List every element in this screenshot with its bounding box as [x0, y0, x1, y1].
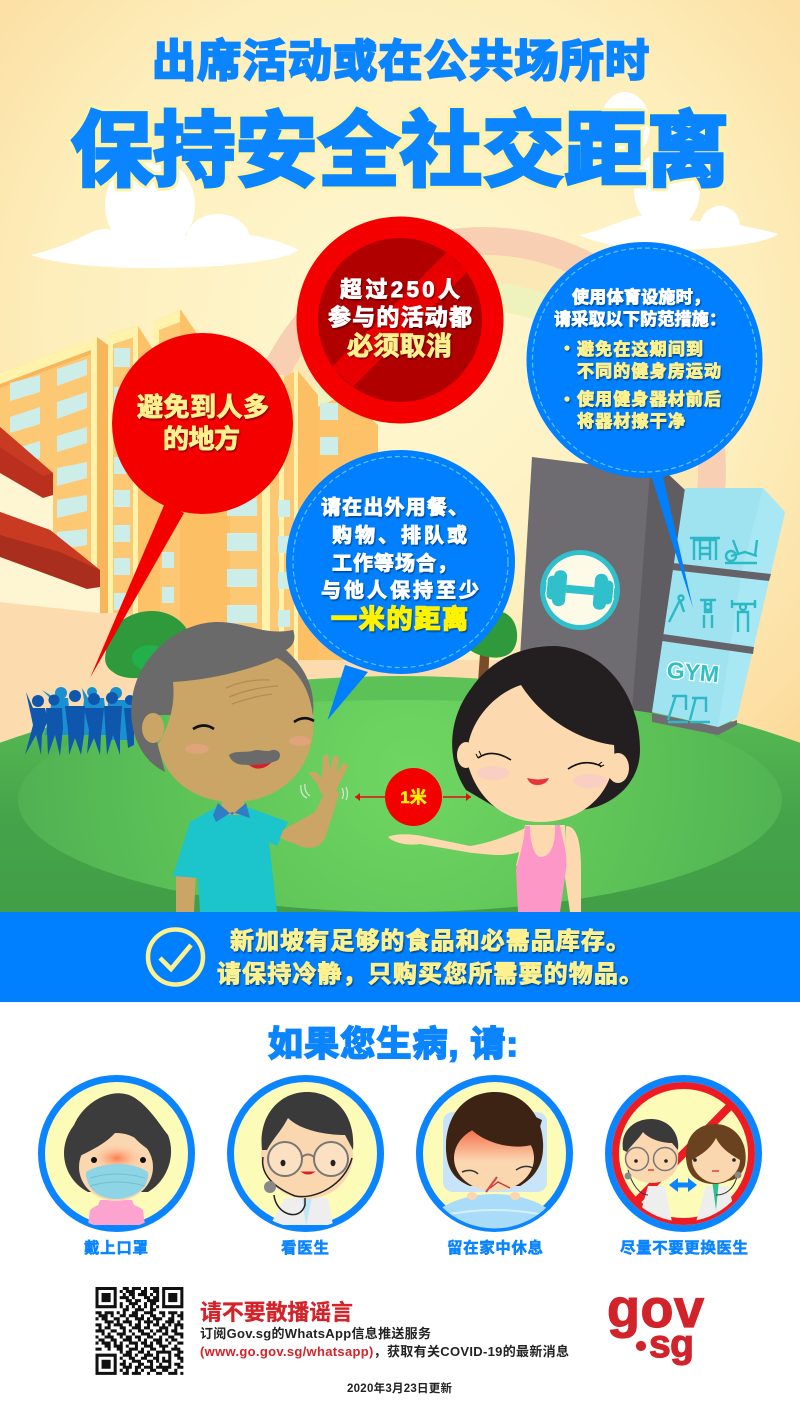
tree right — [470, 612, 517, 682]
label: see a doctor: 看医生 — [281, 1239, 329, 1257]
label: wear a mask: 戴上口罩 — [84, 1238, 148, 1257]
label: rest at home: 留在家中休息 — [447, 1238, 543, 1257]
crowd silhouettes — [25, 687, 135, 756]
check icon — [148, 930, 203, 984]
update date: 2020年3月23日更新 — [347, 1381, 452, 1395]
tree left — [105, 611, 191, 690]
band message — [217, 927, 643, 988]
one metre text: 一米的距离 — [331, 604, 468, 634]
main title line 2: 保持安全社交距离 — [71, 106, 729, 197]
gym building — [518, 457, 785, 735]
woman face — [467, 685, 614, 822]
band message: 新加坡有足够的食品和必需品库存。 — [230, 927, 630, 955]
gym glass front — [652, 488, 785, 727]
sky background — [0, 0, 800, 912]
sports text: 请采取以下防范措施： — [554, 309, 726, 329]
woman mouth — [527, 778, 549, 785]
callout text — [137, 392, 269, 454]
event text: 必须取消 — [347, 331, 452, 361]
apartment windows — [10, 348, 338, 638]
woman arms — [388, 826, 532, 855]
one metre text: 工作等场合， — [332, 552, 457, 575]
GYM sign: GYM — [666, 657, 720, 687]
sports text: 不同的健身房运动 — [577, 362, 721, 381]
woman cheeks — [477, 766, 509, 780]
woman hair back — [452, 646, 640, 810]
whatsapp subscribe line: 订阅Gov.sg的WhatsApp信息推送服务 — [200, 1326, 431, 1341]
man eyes — [193, 718, 314, 729]
heading: if you are sick: 如果您生病, 请: — [268, 1025, 518, 1064]
man wrinkles — [226, 680, 278, 704]
man ear — [142, 713, 164, 743]
icon: rest at home — [416, 1075, 573, 1232]
one metre text: 购物、排队或 — [332, 523, 467, 547]
one metre text — [321, 496, 479, 634]
man raised arm — [280, 790, 340, 848]
man left arm — [176, 872, 196, 912]
woman ears — [457, 742, 475, 768]
rumour warning heading: 请不要散播谣言 — [200, 1300, 353, 1325]
man face — [158, 658, 314, 802]
man hand — [308, 754, 348, 798]
icon: wear a mask — [42, 1078, 192, 1228]
QR code — [96, 1287, 183, 1375]
green hill — [0, 676, 800, 912]
man mouth — [244, 762, 272, 769]
sports text: 将器材擦干净 — [577, 411, 685, 431]
centre blue callout: one metre — [286, 450, 515, 720]
icon: see a doctor — [230, 1078, 380, 1228]
swap arrow — [669, 1178, 697, 1192]
red-roofed building — [0, 427, 100, 620]
cloud left — [31, 157, 298, 268]
gym shelves — [662, 563, 771, 654]
blue callout: sports facilities — [526, 242, 762, 608]
apartment blocks — [0, 310, 378, 700]
icon: do not change doctors — [608, 1078, 758, 1228]
blue message band — [0, 912, 800, 1002]
man shirt — [173, 806, 288, 912]
sports text: 使用健身器材前后 — [577, 390, 721, 409]
woman pink top — [516, 825, 566, 912]
gym equipment icons — [668, 538, 757, 722]
woman neck and chest — [516, 825, 566, 866]
event text — [328, 277, 472, 361]
cloud right — [579, 92, 778, 250]
gov.sg logo: gov — [607, 1279, 704, 1339]
one metre marker — [355, 768, 471, 826]
sports text: 使用体育设施时， — [572, 287, 710, 307]
event text: 参与的活动都 — [328, 304, 472, 330]
man figure — [131, 622, 348, 912]
whatsapp link line: (www.go.gov.sg/whatsapp)，获取有关COVID-19的最新消息 — [200, 1344, 569, 1359]
ground — [0, 602, 130, 760]
label: do not change doctors: 尽量不要更换医生 — [620, 1239, 748, 1257]
man hair back — [131, 622, 313, 772]
one metre text: 与他人保持至少 — [321, 579, 479, 602]
dumbbell badge — [540, 550, 620, 630]
gov.sg logo — [607, 1279, 704, 1366]
sports text — [554, 287, 726, 431]
band message: 请保持冷静，只购买您所需要的物品。 — [217, 961, 643, 988]
no-entry callout: events over 250 — [296, 216, 504, 424]
man neck and collar — [222, 795, 244, 815]
woman figure — [388, 646, 640, 912]
red callout: avoid crowds — [90, 333, 293, 678]
gov.sg logo: sg — [649, 1323, 694, 1366]
one metre marker: 1米 — [400, 788, 427, 807]
man moustache — [229, 750, 280, 765]
main title line 2: 保持安全社交距离 — [71, 106, 729, 197]
main title line 1: 出席活动或在公共场所时 — [152, 37, 649, 86]
callout text: 的地方 — [163, 424, 240, 454]
man cheeks — [185, 744, 209, 754]
one metre text: 请在出外用餐、 — [321, 496, 468, 519]
sports text: 避免在这期间到 — [577, 339, 703, 359]
rainbow — [266, 227, 726, 489]
event text: 超过250人 — [340, 277, 460, 302]
callout text: 避免到人多 — [137, 392, 269, 422]
woman eyes — [478, 753, 601, 769]
